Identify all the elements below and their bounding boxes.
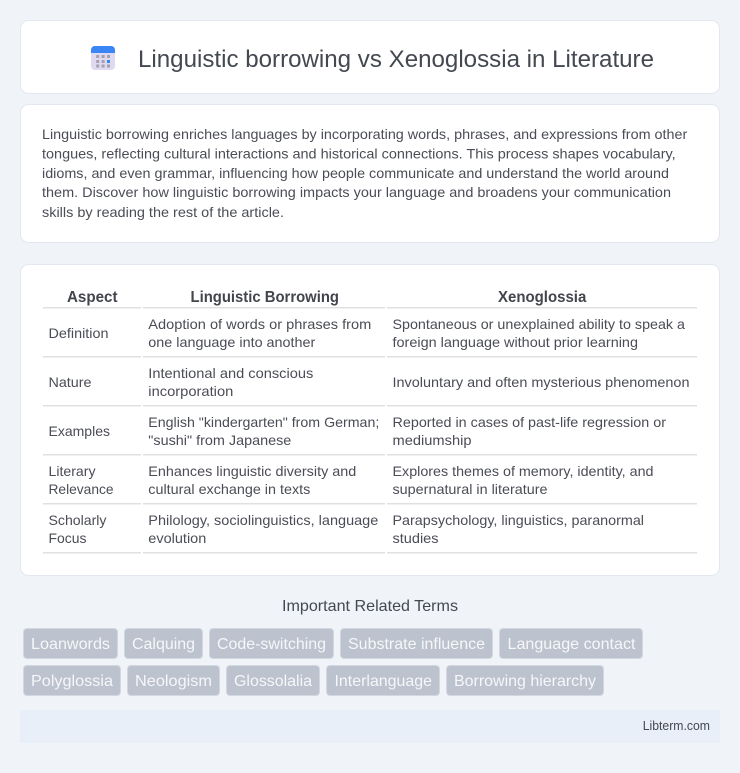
tag: Loanwords: Loanwords bbox=[31, 636, 110, 653]
footer credit: Libterm.com bbox=[643, 719, 710, 733]
row: literary relevance: supernatural in literature bbox=[392, 481, 548, 497]
intro paragraph bbox=[42, 126, 688, 220]
tag: Interlanguage bbox=[326, 666, 440, 696]
related term tags bbox=[24, 628, 642, 696]
row: nature: Intentional and conscious bbox=[148, 365, 313, 381]
tag: Polyglossia: Polyglossia bbox=[31, 673, 113, 690]
row: definition: Adoption of words or phrases from bbox=[148, 316, 371, 332]
row: examples: Reported in cases of past-life regression or bbox=[392, 414, 666, 430]
row: literary relevance: Enhances linguistic diversity and bbox=[148, 463, 356, 479]
tag: Polyglossia bbox=[24, 666, 120, 696]
tag: Glossolalia bbox=[226, 666, 320, 696]
footer bbox=[20, 710, 720, 743]
row: examples: "sushi" from Japanese bbox=[148, 432, 292, 448]
row: literary relevance: Relevance bbox=[48, 481, 114, 497]
panel: introduction bbox=[20, 104, 720, 242]
row: scholarly focus: Philology, sociolinguistics, language bbox=[148, 512, 379, 528]
row: scholarly focus: Scholarly bbox=[48, 512, 106, 528]
row: examples: Examples bbox=[48, 423, 110, 439]
table header row: Aspect bbox=[67, 289, 118, 306]
row: literary relevance: Literary bbox=[48, 463, 96, 479]
intro paragraph: idioms, and even grammar, influencing how people communicate and understand the world around bbox=[42, 165, 669, 181]
tag: Neologism bbox=[128, 666, 220, 696]
tag: Calquing bbox=[124, 628, 202, 658]
table header row: Linguistic Borrowing bbox=[190, 289, 339, 306]
table header row bbox=[43, 289, 697, 308]
intro paragraph: skills by reading the rest of the article. bbox=[42, 204, 284, 220]
tag: Code-switching: Code-switching bbox=[217, 636, 326, 653]
header panel bbox=[20, 20, 720, 94]
row: definition bbox=[43, 316, 697, 358]
tag: Neologism: Neologism bbox=[135, 673, 212, 690]
tag: Substrate influence: Substrate influence bbox=[348, 636, 485, 653]
row: definition: foreign language without prior learning bbox=[392, 334, 638, 350]
tag: Language contact bbox=[500, 628, 642, 658]
tag: Glossolalia: Glossolalia bbox=[234, 673, 312, 690]
tag: Code-switching bbox=[210, 628, 334, 658]
row: examples: mediumship bbox=[392, 432, 472, 448]
intro paragraph: tongues, reflecting cultural interactions and historical connections. This process shapes vocabulary, bbox=[42, 146, 676, 162]
row: examples: English "kindergarten" from German; bbox=[148, 414, 379, 430]
row: literary relevance: Explores themes of memory, identity, and bbox=[392, 463, 654, 479]
icon: calendar bbox=[91, 46, 115, 70]
row: literary relevance: cultural exchange in texts bbox=[148, 481, 310, 497]
tag: Language contact: Language contact bbox=[508, 636, 636, 653]
row: literary relevance bbox=[43, 463, 697, 504]
row: nature: Involuntary and often mysterious phenomenon bbox=[392, 374, 690, 390]
row: nature: Nature bbox=[48, 374, 92, 390]
tag: Loanwords bbox=[24, 628, 118, 658]
intro paragraph: them. Discover how linguistic borrowing impacts your language and broadens your communication bbox=[42, 184, 671, 200]
tag: Borrowing hierarchy: Borrowing hierarchy bbox=[454, 673, 596, 690]
row: nature bbox=[43, 365, 697, 406]
title: Linguistic borrowing vs Xenoglossia in Literature bbox=[138, 46, 654, 73]
row: definition: one language into another bbox=[148, 334, 316, 350]
row: scholarly focus: evolution bbox=[148, 530, 206, 546]
row: scholarly focus: Parapsychology, linguistics, paranormal bbox=[392, 512, 644, 528]
row: definition: Spontaneous or unexplained ability to speak a bbox=[392, 316, 685, 332]
row: scholarly focus bbox=[43, 512, 697, 554]
tag: Interlanguage: Interlanguage bbox=[334, 673, 432, 690]
row: scholarly focus: studies bbox=[392, 530, 438, 546]
row: examples bbox=[43, 414, 697, 456]
tag: Calquing: Calquing bbox=[132, 636, 195, 653]
intro paragraph: Linguistic borrowing enriches languages by incorporating words, phrases, and expressions from other bbox=[42, 126, 688, 142]
panel: comparison table bbox=[20, 264, 720, 576]
tag: Borrowing hierarchy bbox=[446, 666, 604, 696]
row: scholarly focus: Focus bbox=[48, 530, 86, 546]
row: definition: Definition bbox=[48, 325, 108, 341]
row: nature: incorporation bbox=[148, 383, 233, 399]
related terms heading: Important Related Terms bbox=[282, 598, 458, 615]
tag: Substrate influence bbox=[340, 628, 492, 658]
table header row: Xenoglossia bbox=[498, 289, 586, 306]
